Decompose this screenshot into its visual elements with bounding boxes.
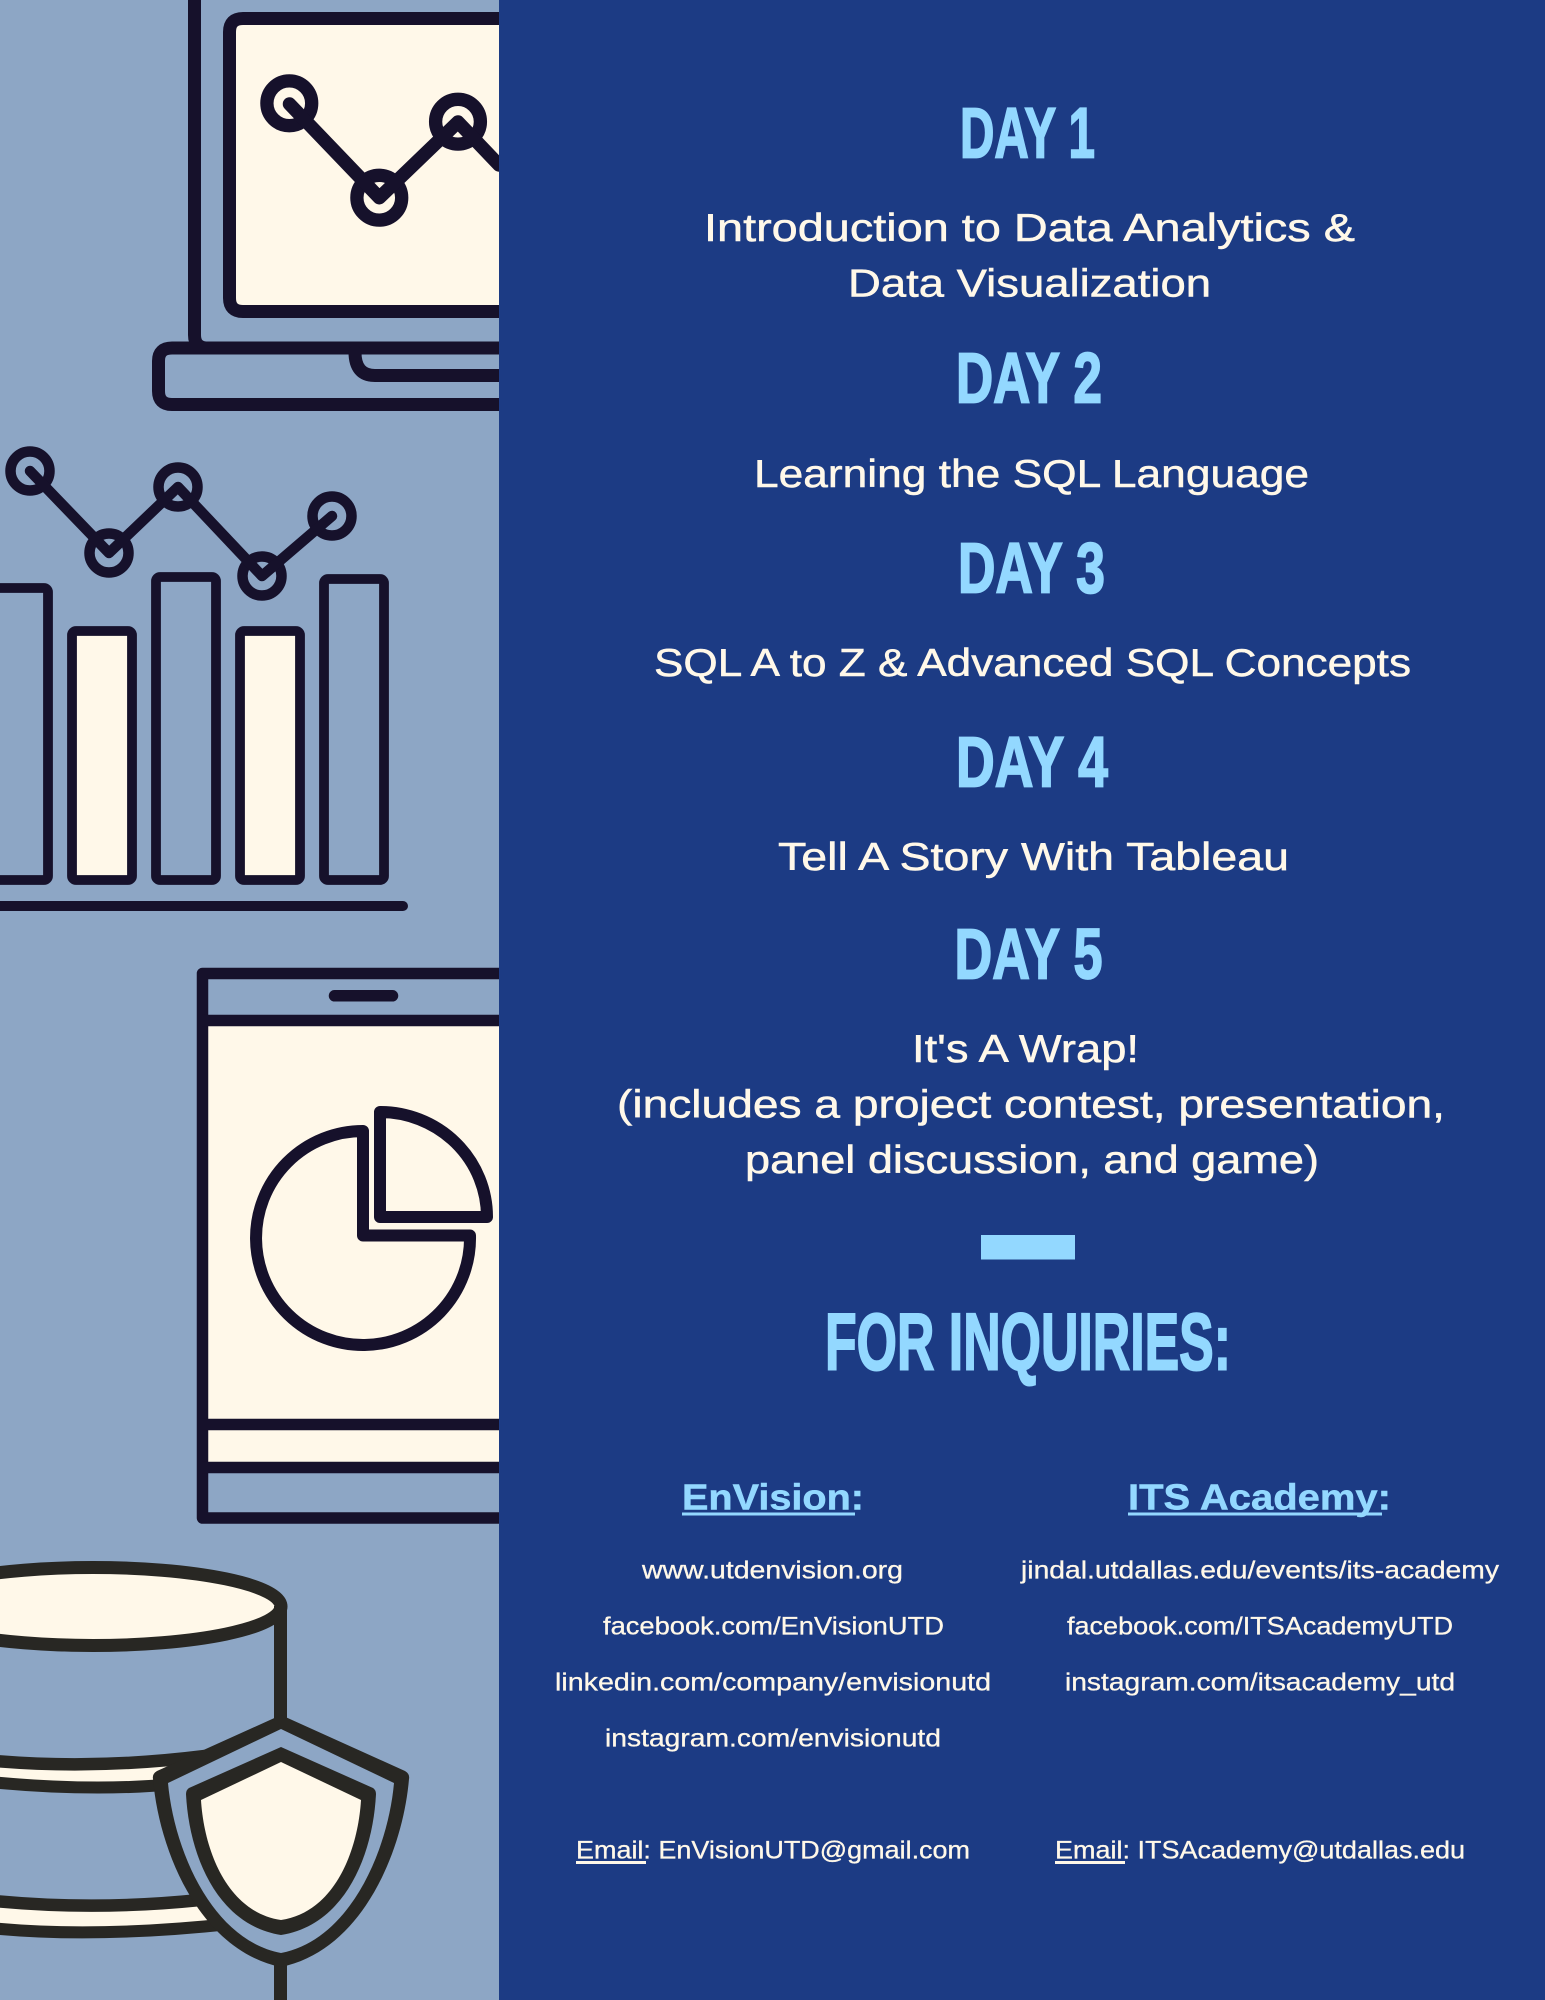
column: EnVision contacts	[555, 1476, 991, 1864]
column: ITS Academy contacts	[1020, 1476, 1500, 1864]
heading: for inquiries: FOR INQUIRIES:	[825, 1298, 1231, 1388]
heading: day 4: DAY 4	[956, 724, 1108, 802]
divider bar	[981, 1235, 1075, 1260]
bar 2	[72, 631, 132, 880]
icon: tablet with pie chart	[202, 974, 499, 1518]
bar 4	[240, 631, 300, 880]
text: day 1 description: Introduction to Data Analytics &	[704, 207, 1355, 250]
chart: bars with line overlay	[0, 452, 403, 906]
icon: database with shield	[0, 1568, 409, 2000]
column: EnVision contacts: www.utdenvision.org	[641, 1556, 903, 1584]
heading: day 1: DAY 1	[960, 94, 1095, 174]
heading: day 3: DAY 3	[958, 530, 1105, 608]
text: day 5 description: panel discussion, and game)	[745, 1139, 1319, 1182]
text: day 4 description: Tell A Story With Tableau	[778, 836, 1289, 879]
column: EnVision contacts: instagram.com/envisionutd	[605, 1724, 941, 1752]
line series	[10, 452, 352, 596]
column: ITS Academy contacts: instagram.com/itsacademy_utd	[1065, 1668, 1455, 1696]
subheading: EnVision: EnVision:	[682, 1476, 864, 1518]
panel: right schedule background	[499, 0, 1545, 2000]
email line: Email: ITSAcademy@utdallas.edu	[1055, 1836, 1465, 1864]
bar 5	[324, 579, 384, 880]
heading: day 2: DAY 2	[956, 340, 1102, 418]
column: EnVision contacts: linkedin.com/company/envisionutd	[555, 1668, 991, 1696]
text: day 2 description: Learning the SQL Language	[754, 453, 1309, 496]
text: day 5 description: (includes a project contest, presentation,	[617, 1084, 1445, 1126]
bar 3	[156, 577, 216, 880]
bar 1	[0, 588, 48, 880]
column: ITS Academy contacts: jindal.utdallas.edu/events/its-academy	[1020, 1556, 1500, 1584]
subheading: ITS Academy: ITS Academy:	[1128, 1476, 1391, 1518]
shield	[153, 1715, 409, 1967]
text: day 3 description: SQL A to Z & Advanced SQL Concepts	[654, 642, 1411, 685]
email line: Email: EnVisionUTD@gmail.com	[576, 1836, 970, 1864]
icon: laptop with line chart	[158, 0, 499, 404]
chart baseline	[0, 901, 403, 911]
panel: left illustration background	[0, 0, 499, 2000]
column: ITS Academy contacts: facebook.com/ITSAcademyUTD	[1067, 1612, 1453, 1640]
text: day 1 description	[704, 207, 1355, 306]
text: day 5 description	[617, 1028, 1445, 1182]
database cylinder	[0, 1568, 281, 2000]
text: day 5 description: It's A Wrap!	[912, 1028, 1139, 1071]
text: day 1 description: Data Visualization	[848, 262, 1211, 306]
heading: day 5: DAY 5	[954, 916, 1102, 994]
pie chart	[256, 1112, 487, 1345]
column: EnVision contacts: facebook.com/EnVisionUTD	[603, 1612, 944, 1640]
